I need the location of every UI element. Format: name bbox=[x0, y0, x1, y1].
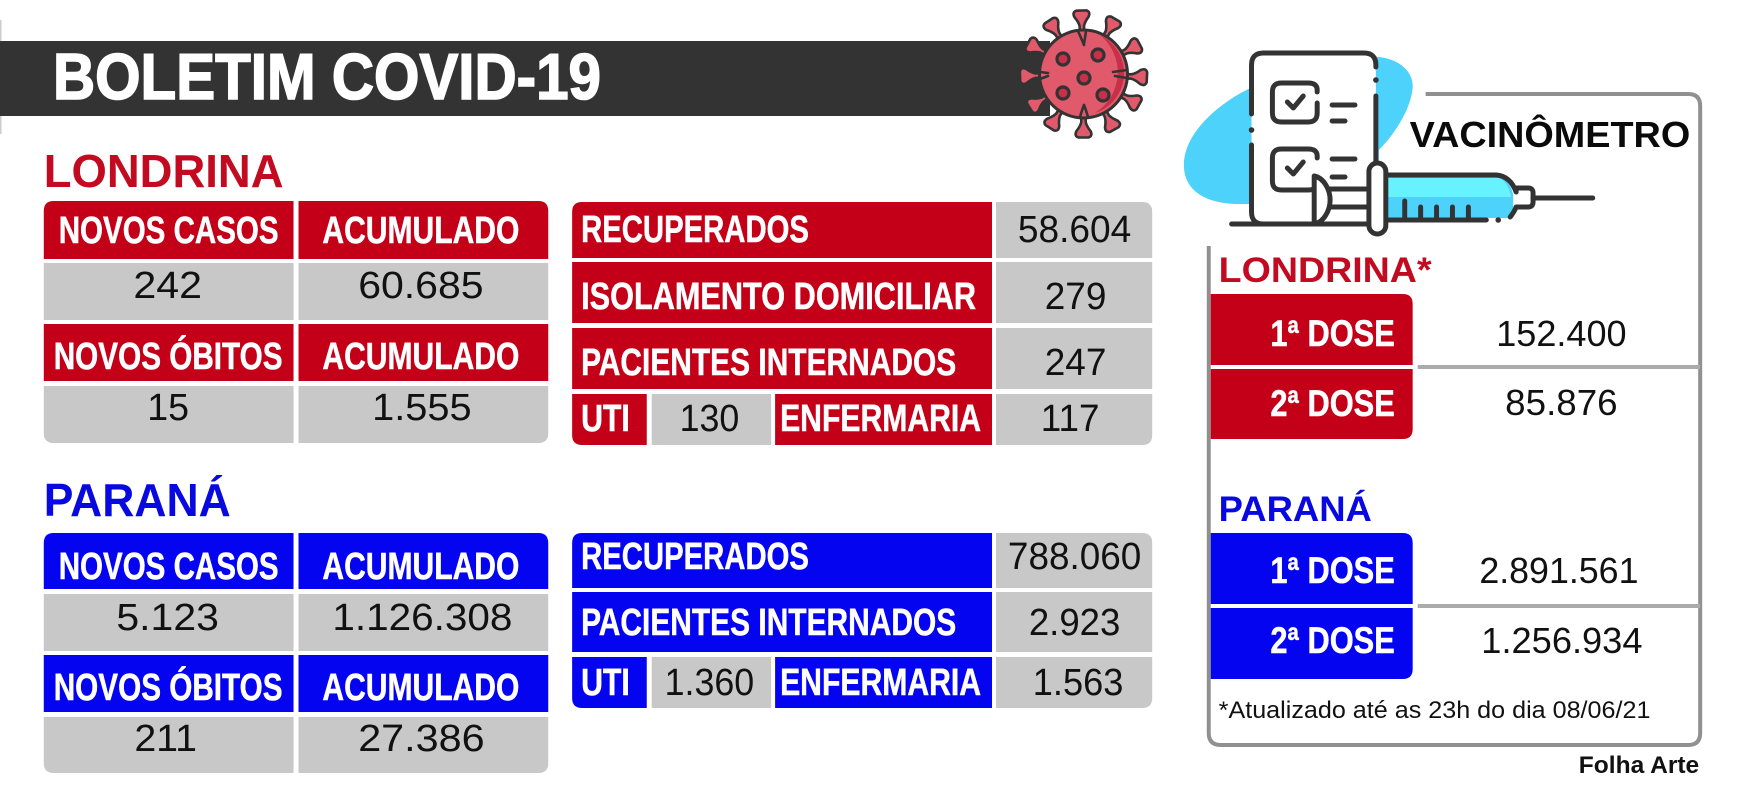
credit: Folha Arte bbox=[1579, 752, 1699, 779]
panel: Paraná doses bbox=[1211, 533, 1700, 679]
panel: Londrina status table: 130 bbox=[680, 398, 739, 440]
panel: Paraná status table: 1.563 bbox=[1033, 662, 1123, 704]
panel: Londrina status table: 58.604 bbox=[1018, 209, 1131, 251]
panel: Paraná cases table: NOVOS ÓBITOS bbox=[54, 665, 283, 709]
vaccine meter frame bbox=[1209, 94, 1700, 745]
heading: Paraná: PARANÁ bbox=[44, 474, 231, 526]
panel: Paraná cases table: 211 bbox=[134, 718, 197, 760]
heading: Vacinômetro: VACINÔMETRO bbox=[1410, 115, 1690, 155]
panel: Londrina cases table: ACUMULADO bbox=[322, 210, 519, 252]
title banner: BOLETIM COVID-19 bbox=[53, 40, 601, 113]
panel: Londrina status table: 247 bbox=[1045, 342, 1106, 384]
panel: Paraná cases table: 5.123 bbox=[116, 597, 219, 639]
panel: Paraná doses: 1ª DOSE bbox=[1270, 550, 1395, 591]
panel: Londrina status table: ISOLAMENTO DOMICILIAR bbox=[581, 276, 976, 318]
panel: Paraná cases table: ACUMULADO bbox=[322, 667, 519, 709]
panel: Londrina status table: 117 bbox=[1041, 398, 1099, 440]
panel: Londrina cases table: 60.685 bbox=[358, 265, 484, 307]
panel: Londrina cases table: 1.555 bbox=[372, 387, 472, 429]
panel: Londrina doses bbox=[1211, 294, 1700, 439]
panel: Paraná cases table bbox=[44, 533, 548, 773]
panel: Londrina doses: 85.876 bbox=[1505, 383, 1618, 423]
panel: Londrina doses: 152.400 bbox=[1496, 314, 1627, 354]
heading: Londrina vaccines: LONDRINA* bbox=[1219, 251, 1432, 290]
panel: Paraná status table: ENFERMARIA bbox=[780, 662, 981, 704]
panel: Paraná doses: 1.256.934 bbox=[1481, 621, 1642, 661]
panel: Londrina doses: 2ª DOSE bbox=[1270, 383, 1395, 424]
panel: Londrina status table: UTI bbox=[581, 398, 630, 440]
panel: Londrina doses: 1ª DOSE bbox=[1270, 313, 1395, 354]
panel: Paraná doses: 2ª DOSE bbox=[1270, 620, 1395, 661]
panel: Paraná cases table: 1.126.308 bbox=[332, 597, 512, 639]
panel: Paraná status table: RECUPERADOS bbox=[581, 536, 809, 578]
panel: Paraná status table: 2.923 bbox=[1029, 602, 1120, 644]
panel: Londrina status table: 279 bbox=[1045, 276, 1106, 318]
panel: Paraná status table: PACIENTES INTERNADOS bbox=[581, 602, 956, 644]
panel: left column tables bbox=[44, 145, 1152, 773]
panel: Londrina cases table bbox=[44, 201, 548, 443]
heading: Londrina: LONDRINA bbox=[44, 145, 284, 197]
panel: Paraná cases table: NOVOS CASOS bbox=[59, 546, 279, 588]
panel: Londrina status table: RECUPERADOS bbox=[581, 209, 809, 251]
panel: Londrina cases table: 15 bbox=[147, 387, 189, 429]
panel: Londrina status table: ENFERMARIA bbox=[780, 398, 981, 440]
panel: Paraná cases table: ACUMULADO bbox=[322, 546, 519, 588]
title banner bbox=[0, 20, 1050, 134]
panel: Londrina cases table: ACUMULADO bbox=[322, 336, 519, 378]
heading: Paraná vaccines: PARANÁ bbox=[1219, 489, 1372, 529]
icon: clipboard and syringe bbox=[1184, 53, 1593, 234]
icon: virus bbox=[1020, 10, 1147, 137]
panel: Paraná status table bbox=[572, 533, 1152, 708]
panel: Londrina status table bbox=[572, 202, 1152, 445]
panel: Paraná status table: 788.060 bbox=[1008, 536, 1141, 578]
panel: Londrina cases table: 242 bbox=[133, 265, 202, 307]
panel: Paraná status table: UTI bbox=[581, 662, 630, 704]
panel: Paraná doses: 2.891.561 bbox=[1479, 551, 1638, 591]
panel: Paraná cases table: 27.386 bbox=[358, 718, 485, 760]
panel: Paraná status table: 1.360 bbox=[665, 662, 754, 704]
footnote: *Atualizado até as 23h do dia 08/06/21 bbox=[1219, 697, 1650, 724]
panel: vaccine meter column bbox=[1184, 53, 1700, 779]
panel: Londrina cases table: NOVOS CASOS bbox=[59, 210, 279, 252]
panel: Londrina status table: PACIENTES INTERNADOS bbox=[581, 342, 956, 384]
panel: Londrina cases table: NOVOS ÓBITOS bbox=[54, 334, 283, 378]
